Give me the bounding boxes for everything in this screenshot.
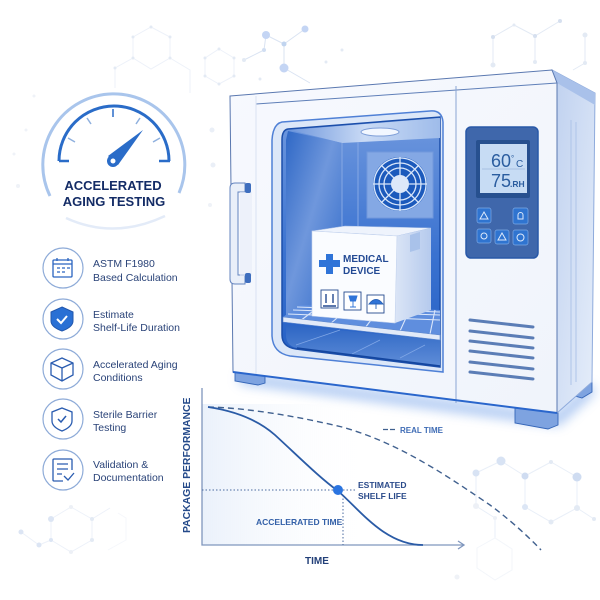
gauge ticks: [68, 118, 160, 142]
ventilation slots: [470, 320, 533, 379]
incubator chamber: [230, 70, 595, 429]
display readings: °: [511, 154, 514, 163]
ceiling lamp: [361, 128, 399, 136]
fan unit: [367, 152, 433, 218]
x axis label: TIME: [305, 556, 329, 567]
control panel: .RH: [510, 179, 525, 189]
handling symbols: [321, 290, 384, 313]
shelf life marker: [333, 485, 343, 495]
gauge arc: [59, 106, 169, 161]
feet: [235, 370, 592, 429]
axes: [202, 388, 464, 549]
item: shelf-life: Shelf-Life Duration: [93, 322, 180, 334]
door handle: [230, 183, 252, 284]
window frame: [272, 111, 443, 372]
box label: DEVICE: [343, 266, 381, 277]
item: validation: Documentation: [93, 472, 164, 484]
cabinet shadow: [240, 378, 592, 420]
badge title: ACCELERATED: [64, 178, 162, 193]
item: aging conditions: Accelerated Aging: [93, 359, 178, 371]
accelerated curve: [208, 407, 423, 545]
wire shelf: [283, 305, 440, 340]
gauge needle: [108, 130, 143, 165]
feature list: [43, 248, 180, 490]
guide lines: [202, 490, 355, 545]
item: ASTM F1980: ASTM F1980: [93, 258, 155, 270]
ceiling: [290, 118, 440, 143]
item: sterile barrier: Testing: [93, 422, 126, 434]
cabinet side panel: [552, 70, 595, 413]
badge title: AGING TESTING: [63, 194, 165, 209]
item: sterile barrier: Sterile Barrier: [93, 409, 158, 421]
display screen: [476, 140, 530, 198]
control panel: 75: [491, 171, 511, 191]
left wall: [286, 131, 342, 320]
item: aging conditions: Conditions: [93, 372, 143, 384]
item: shelf-life: Estimate: [93, 309, 134, 321]
display readings: 60: [491, 151, 511, 171]
panel buttons: [477, 208, 528, 245]
y axis label: PACKAGE PERFORMANCE: [182, 397, 193, 533]
box label: MEDICAL: [343, 254, 389, 265]
accelerated time label: ACCELERATED TIME: [256, 517, 343, 527]
estimated shelf life label: SHELF LIFE: [358, 491, 407, 501]
control panel: [466, 127, 538, 258]
item: ASTM F1980: Based Calculation: [93, 272, 178, 284]
item: aging conditions: [43, 349, 178, 389]
cabinet front: [230, 70, 557, 413]
estimated shelf life label: ESTIMATED: [358, 480, 406, 490]
item: validation: [43, 450, 164, 490]
badge ring: [43, 94, 185, 196]
lower chamber floor: [286, 325, 440, 366]
medical device box: [312, 226, 431, 323]
item: ASTM F1980: [43, 248, 178, 288]
item: shelf-life: [43, 299, 180, 339]
item: validation: Validation &: [93, 459, 148, 471]
item: sterile barrier: [43, 399, 158, 439]
display readings: C: [516, 159, 523, 170]
real time legend: REAL TIME: [400, 426, 444, 435]
gauge badge: [43, 94, 185, 229]
chart background: [202, 404, 372, 545]
medical cross: [319, 254, 340, 274]
performance chart: [182, 388, 541, 567]
chamber back wall: [282, 117, 440, 367]
real time curve: [208, 407, 541, 550]
